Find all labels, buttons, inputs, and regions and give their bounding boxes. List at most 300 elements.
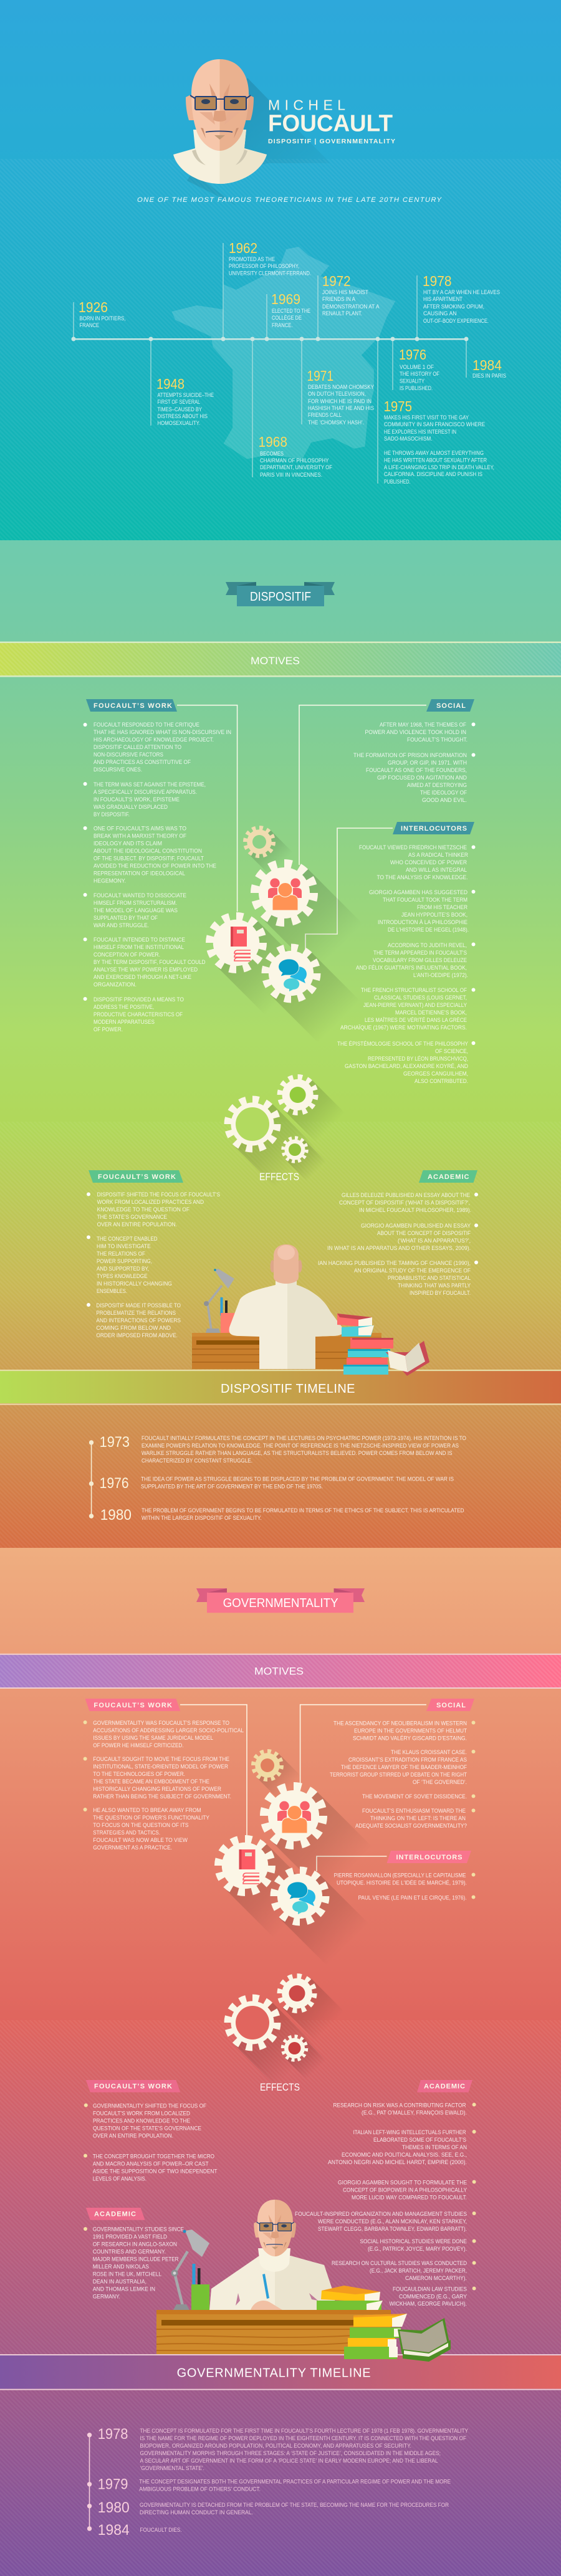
- event 1971: 1971: [307, 368, 333, 384]
- ribbon: Academic effects: [417, 2080, 472, 2092]
- text block: social 1: AFTER MAY 1968, THE THEMES OF: [380, 722, 466, 728]
- text block: Foucault's work 4: [84, 892, 186, 929]
- text block: effects left 1: FOUCAULT’S WORK FROM LOCALIZED: [93, 2110, 190, 2117]
- text block: gov interlocutors 1: UTOPIQUE. HISTOIRE DE L’IDÉE DE MARCHÉ, 1979).: [337, 1879, 467, 1887]
- map of France: [172, 247, 395, 459]
- ribbon: Foucault's Work effects: FOUCAULT’S WORK: [98, 1173, 176, 1181]
- text block: effects academic 3: IAN HACKING PUBLISHED THE TAMING OF CHANCE (1990),: [318, 1260, 471, 1267]
- text block: effects academic 3: PROBABILISTIC AND STATISTICAL: [388, 1275, 471, 1282]
- timeline entry 1979: AMBIGUOUS PROBLEM OF OTHERS’ CONDUCT.: [139, 2486, 261, 2493]
- event 1948: HOMOSEXUALITY.: [157, 420, 200, 427]
- text block: academic right 2: ELABORATED SOME OF FOUCAULT’S: [373, 2137, 466, 2144]
- text block: interlocutors 5: THE ÉPISTÉMOLOGIE SCHOOL OF THE PHILOSOPHY: [337, 1041, 469, 1047]
- text block: interlocutors 2: GIORGIO AGAMBEN HAS SUGGESTED: [369, 889, 467, 896]
- text block: gov work 2: HISTORICALLY CHANGING RELATIONS OF POWER: [93, 1786, 221, 1793]
- text block: gov work 3: [84, 1807, 210, 1851]
- text block: effects academic 3: [318, 1260, 478, 1297]
- event 1969: FRANCE.: [272, 322, 293, 329]
- event 1978: [423, 273, 500, 325]
- text block: effects academic 2: ABOUT THE CONCEPT OF DISPOSITIF: [377, 1230, 471, 1237]
- background: governmentality section: [0, 1548, 561, 2576]
- text block: interlocutors 5: REPRESENTED BY LÉON BRUNSCHVICQ,: [368, 1056, 468, 1062]
- text block: interlocutors 1: AS A RADICAL THINKER: [408, 852, 468, 859]
- text block: gov work 2: TO THE TECHNOLOGIES OF POWER.: [93, 1771, 185, 1778]
- text block: interlocutors 2: FROM HIS TEACHER: [417, 904, 467, 911]
- text block: social 2: THE FORMATION OF PRISON INFORMATION: [353, 752, 467, 759]
- text block: gov social 4: FOUCAULT’S ENTHUSIASM TOWARD THE: [362, 1808, 466, 1815]
- event 1978: OUT-OF-BODY EXPERIENCE.: [423, 318, 489, 325]
- event 1971: FOR WHICH HE IS PAID IN: [308, 398, 372, 405]
- text block: academic left: [84, 2226, 184, 2301]
- ribbon: Foucault's Work: FOUCAULT’S WORK: [94, 1702, 172, 1709]
- event 1926: FRANCE: [80, 322, 99, 329]
- text block: effects left 3: DISPOSITIF MADE IT POSSIBLE TO: [96, 1302, 181, 1309]
- event 1978: AFTER SMOKING OPIUM,: [423, 303, 484, 310]
- text block: Foucault's work 2: WAS GRADUALLY DISPLACED: [94, 804, 168, 811]
- connector lines: [177, 705, 426, 949]
- text block: Foucault's work 1: HIS ARCHAEOLOGY OF KNOWLEDGE PROJECT.: [94, 737, 214, 743]
- text block: effects left 1: QUESTION OF THE STATE’S GOVERNANCE: [93, 2125, 201, 2132]
- timeline entry 1984: FOUCAULT DIES.: [140, 2527, 182, 2534]
- text block: gov social 2: THE KLAUS CROISSANT CASE.: [391, 1749, 467, 1756]
- text block: interlocutors 2: JEAN HYPPOLITE’S BOOK,: [401, 912, 467, 918]
- text block: social 1: FOUCAULT’S THOUGHT.: [407, 737, 467, 743]
- band: Dispositif timeline: DISPOSITIF TIMELINE: [221, 1382, 355, 1396]
- text block: social 2: GROUP, OR GIP, IN 1971. WITH: [388, 760, 467, 766]
- text block: academic right 3: CONCEPT OF BIOPOWER IN A PHILOSOPHICALLY: [343, 2187, 467, 2193]
- ribbon: Social: [426, 699, 474, 712]
- text block: academic right 7: COMMENCED (E.G., GARY: [399, 2293, 467, 2301]
- band: motives: [0, 642, 561, 677]
- open book: [398, 2318, 451, 2362]
- text block: Foucault's work 5: ANALYSE THE WAY POWER IS EMPLOYED: [94, 966, 198, 973]
- bottom of stack overlapping band: [344, 2340, 451, 2362]
- timeline entry 1980: DIRECTING HUMAN CONDUCT IN GENERAL.: [140, 2509, 253, 2516]
- text block: Foucault's work 5: AND EXERCISED THROUGH A NET-LIKE: [94, 974, 191, 981]
- text block: academic left: OF RESEARCH IN ANGLO-SAXON: [93, 2241, 177, 2248]
- timeline entry 1976: 1976: [100, 1475, 129, 1492]
- text block: gov social 2: TERRORIST GROUP STIRRED UP DEBATE ON THE RIGHT: [330, 1772, 467, 1778]
- event 1971: HASHISH THAT HE AND HIS: [308, 405, 374, 412]
- band: Governmentality timeline: [0, 2354, 561, 2390]
- text block: social 2: THE IDEOLOGY OF: [420, 789, 467, 796]
- event 1975: HE THROWS AWAY ALMOST EVERYTHING: [384, 450, 484, 457]
- text block: Foucault's work 3: [84, 825, 216, 885]
- text block: gov social 4: THINKING ON THE LEFT: IS THERE AN: [370, 1815, 466, 1822]
- panel: dispositif section: [0, 582, 561, 1524]
- connector lines: [180, 1705, 426, 1871]
- text block: interlocutors 5: OF SCIENCE,: [435, 1048, 468, 1055]
- timeline entry 1973: CHARACTERIZED BY CONSTANT STRUGGLE.: [141, 1457, 252, 1464]
- event 1962: 1962: [229, 240, 257, 256]
- gear: chat icon: [274, 1871, 369, 1966]
- timeline entry 1973: FOUCAULT INITIALLY FORMULATES THE CONCEPT IN THE LECTURES ON PSYCHIATRIC POWER (1973-1974). HIS INTENTION IS TO: [141, 1435, 466, 1442]
- text block: Foucault's work 4: FOUCAULT WANTED TO DISSOCIATE: [94, 892, 186, 899]
- banner: Dispositif: [226, 582, 335, 606]
- text block: gov work 3: THE QUESTION OF POWER’S FUNCTIONALITY: [93, 1815, 210, 1821]
- text block: Foucault's work 1: AND PRACTICES AS CONSTITUTIVE OF: [94, 759, 191, 766]
- text block: effects left 3: PROBLEMATIZE THE RELATIONS: [96, 1310, 176, 1317]
- timeline entry 1976: THE IDEA OF POWER AS STRUGGLE BEGINS TO BE DISPLACED BY THE PROBLEM OF GOVERNMENT. THE MODEL OF WAR IS: [141, 1476, 454, 1483]
- event 1975: [384, 398, 494, 485]
- gear: book icon: [219, 1839, 317, 1938]
- ribbon: Foucault's Work effects: [86, 2080, 180, 2092]
- tagline: ONE OF THE MOST FAMOUS THEORETICIANS IN THE LATE 20TH CENTURY: [137, 196, 442, 204]
- text block: gov work 3: STRATEGIES AND TACTICS.: [93, 1829, 160, 1836]
- text block: effects academic 3: THINKING THAT WAS PARTLY: [398, 1282, 471, 1289]
- timeline entry 1978: [98, 2426, 469, 2472]
- text block: gov work 3: FOUCAULT WAS NOW ABLE TO VIEW: [93, 1837, 188, 1844]
- event 1971: THE ‘CHOMSKY HASH’.: [308, 419, 364, 426]
- text block: Foucault's work 4: THE MODEL OF LANGUAGE WAS: [94, 907, 178, 914]
- text block: gov interlocutors 1: PIERRE ROSANVALLON (ESPECIALLY LE CAPITALISME: [334, 1872, 466, 1879]
- text block: Foucault's work 5: [84, 937, 206, 988]
- event 1976: IS PUBLISHED.: [400, 385, 433, 392]
- text block: Foucault's work 2: IN FOUCAULT’S WORK, EPISTEME: [94, 796, 180, 803]
- text block: academic left: GOVERNMENTALITY STUDIES SINCE: [93, 2226, 184, 2233]
- text block: Foucault's work 6: PRODUCTIVE CHARACTERISTICS OF: [94, 1011, 183, 1018]
- event 1984: [472, 357, 506, 379]
- text block: Foucault's work 6: OF POWER.: [94, 1026, 123, 1033]
- text block: gov interlocutors 2: PAUL VEYNE (LE PAIN ET LE CIRQUE, 1976).: [358, 1894, 467, 1902]
- timeline entry 1973: [100, 1434, 466, 1464]
- heading: effects: EFFECTS: [260, 2081, 300, 2093]
- timeline entry 1973: 1973: [100, 1434, 130, 1451]
- event 1984: DIES IN PARIS: [472, 373, 506, 379]
- text block: Foucault's work 3: ONE OF FOUCAULT’S AIMS WAS TO: [94, 825, 186, 832]
- text block: interlocutors 1: FOUCAULT VIEWED FRIEDRICH NIETZSCHE: [359, 844, 467, 851]
- heading: effects: EFFECTS: [259, 1171, 299, 1183]
- books on desk: [317, 2286, 383, 2311]
- text block: effects left 1: GOVERNMENTALITY SHIFTED THE FOCUS OF: [93, 2102, 206, 2110]
- text block: academic right 6: (E.G., JACK BRATICH, JEREMY PACKER,: [370, 2268, 467, 2274]
- event 1972: 1972: [322, 273, 350, 289]
- timeline entry 1978: BIOPOWER, ORGANIZED AROUND POPULATION, POLITICAL ECONOMY, AND APPARATUSES OF SECURITY.: [140, 2443, 411, 2450]
- portrait long shadow: [187, 78, 330, 206]
- event 1969: 1969: [271, 291, 300, 307]
- text block: academic right 1: [333, 2102, 476, 2116]
- text block: social 2: GIP FOCUSED ON AGITATION AND: [377, 775, 467, 781]
- ribbon: Interlocutors: [393, 822, 474, 834]
- text block: academic right 4: WERE CONDUCTED (E.G., ALAN MCKINLAY, KEN STARKEY,: [318, 2218, 467, 2225]
- text block: effects left 1: DISPOSITIF SHIFTED THE FOCUS OF FOUCAULT’S: [97, 1191, 220, 1198]
- chart: governmentality timeline axis: [87, 2433, 92, 2531]
- text block: effects left 1: WORK FROM LOCALIZED PRACTICES AND: [97, 1199, 204, 1206]
- event 1978: HIS APARTMENT: [423, 296, 463, 303]
- event 1975: COMMUNITY IN SAN FRANCISCO WHERE: [384, 421, 485, 428]
- text block: academic right 2: ITALIAN LEFT-WING INTELLECTUALS FURTHER: [353, 2129, 466, 2136]
- text block: Foucault's work 1: FOUCAULT RESPONDED TO THE CRITIQUE: [94, 722, 199, 728]
- banner: Governmentality: GOVERNMENTALITY: [223, 1596, 338, 1610]
- text block: interlocutors 2: [369, 889, 475, 933]
- ribbon: Academic effects: ACADEMIC: [428, 1173, 469, 1181]
- hand and pen: [251, 2274, 282, 2310]
- event 1978: HIT BY A CAR WHEN HE LEAVES: [423, 289, 500, 296]
- timeline entry 1984: 1984: [98, 2522, 130, 2539]
- text block: interlocutors 2: INTRODUCTION À LA PHILOSOPHIE: [378, 919, 467, 926]
- text block: effects left 2: LEVELS OF ANALYSIS.: [93, 2176, 146, 2182]
- text block: effects left 3: COMING FROM BELOW AND: [96, 1325, 171, 1332]
- text block: gov work 3: TO FOCUS ON THE QUESTION OF ITS: [93, 1822, 188, 1829]
- text block: effects left 2: [87, 1235, 172, 1295]
- text block: effects academic 2: (‘WHAT IS AN APPARATUS?’,: [398, 1238, 471, 1244]
- text block: gov social 2: OF ‘THE GOVERNED’.: [413, 1779, 467, 1786]
- event 1972: DEMONSTRATION AT A: [322, 303, 380, 310]
- text block: gov social 3: THE MOVEMENT OF SOVIET DISSIDENCE.: [362, 1793, 467, 1800]
- text block: gov work 1: [84, 1720, 244, 1749]
- event 1962: [229, 240, 311, 277]
- text block: effects left 2: HIM TO INVESTIGATE: [97, 1243, 151, 1250]
- text block: academic right 1: RESEARCH ON RISK WAS A CONTRIBUTING FACTOR: [333, 2102, 466, 2109]
- text block: Foucault's work 6: ADDRESS THE POSITIVE,: [94, 1004, 154, 1011]
- text block: effects academic 2: GIORGIO AGAMBEN PUBLISHED AN ESSAY: [361, 1223, 471, 1229]
- text block: social 1: POWER AND VIOLENCE TOOK HOLD IN: [365, 729, 466, 736]
- event 1926: 1926: [79, 299, 108, 315]
- text block: interlocutors 1: AND WILL AS INTEGRAL: [406, 867, 467, 874]
- text block: gov social 2: THE DEFENCE LAWYER OF THE BAADER-MEINHOF: [341, 1764, 467, 1771]
- ribbon: Interlocutors: INTERLOCUTORS: [396, 1854, 463, 1861]
- timeline entry 1984: [98, 2522, 182, 2539]
- event 1962: PROMOTED AS THE: [229, 256, 275, 263]
- text block: gov work 3: GOVERNMENT AS A PRACTICE.: [93, 1844, 172, 1851]
- ribbon: Social: [426, 1699, 474, 1711]
- event 1969: [271, 291, 310, 329]
- text block: Foucault's work 3: AVOIDED THE REDUCTION OF POWER INTO THE: [94, 862, 216, 870]
- text block: social 2: [353, 752, 475, 804]
- event 1968: BECOMES: [260, 451, 284, 457]
- event 1971: [307, 368, 374, 426]
- text block: effects left 2: [84, 2154, 218, 2182]
- text block: effects academic 2: [327, 1223, 478, 1252]
- text block: Foucault's work 5: ORGANIZATION.: [94, 981, 137, 988]
- text block: effects left 1: PRACTICES AND KNOWLEDGE TO THE: [93, 2117, 190, 2125]
- event 1926: [79, 299, 126, 329]
- event 1969: ELECTED TO THE: [272, 308, 310, 315]
- band: Dispositif timeline: [0, 1370, 561, 1405]
- text block: interlocutors 4: [340, 987, 475, 1031]
- text block: interlocutors 4: MARCEL DETIENNE’S BOOK,: [395, 1009, 467, 1016]
- text block: Foucault's work 4: SUPPLANTED BY THAT OF: [94, 915, 158, 922]
- text block: social 1: [365, 722, 475, 743]
- text block: academic left: COUNTRIES AND GERMANY.: [93, 2248, 166, 2256]
- text block: Foucault's work 6: DISPOSITIF PROVIDED A MEANS TO: [94, 996, 184, 1003]
- text block: effects left 1: OVER AN ENTIRE POPULATION.: [97, 1221, 177, 1228]
- timeline entry 1976: [100, 1475, 454, 1492]
- text block: interlocutors 4: LES MAÎTRES DE VÉRITÉ DANS LA GRÈCE: [365, 1017, 467, 1024]
- text block: Foucault's work 2: THE TERM WAS SET AGAINST THE EPISTEME,: [94, 781, 206, 788]
- text block: Foucault's work 5: FOUCAULT INTENDED TO DISTANCE: [94, 937, 185, 943]
- text block: social 2: FOUCAULT AS ONE OF THE FOUNDERS,: [366, 767, 467, 774]
- text block: interlocutors 4: ARCHAÏQUE (1967) WERE MOTIVATING FACTORS.: [340, 1024, 467, 1031]
- event 1975: HE HAS WRITTEN ABOUT SEXUALITY AFTER: [384, 457, 487, 464]
- text block: academic right 4: [295, 2211, 476, 2233]
- timeline entry 1979: THE CONCEPT DESIGNATES BOTH THE GOVERNMENTAL PRACTICES OF A PARTICULAR REGIME OF POWER AND THE MORE: [139, 2479, 451, 2485]
- text block: effects left 2: AND MACRO ANALYSIS OF POWER–OR CAST: [93, 2161, 209, 2167]
- text block: interlocutors 4: JEAN-PIERRE VERNANT) AND ESPECIALLY: [363, 1002, 467, 1009]
- illustration: Foucault at desk from behind: [192, 1244, 429, 1375]
- timeline entry 1978: 1978: [98, 2426, 128, 2443]
- text block: academic right 7: FOUCAULDIAN LAW STUDIES: [393, 2286, 467, 2293]
- text block: Foucault's work 4: HIMSELF FROM STRUCTURALISM.: [94, 900, 177, 907]
- event 1972: RENAULT PLANT.: [322, 310, 362, 317]
- books stack top: [337, 1314, 374, 1337]
- text block: effects left 2: TYPES KNOWLEDGE: [97, 1273, 147, 1280]
- event 1976: THE HISTORY OF: [400, 371, 439, 378]
- event 1968: [258, 434, 332, 479]
- books stack bottom: [343, 1338, 393, 1375]
- pen cup: [191, 2264, 209, 2310]
- event 1968: DEPARTMENT, UNIVERSITY OF: [260, 464, 332, 471]
- text block: Foucault's work 1: DISPOSITIF CALLED ATTENTION TO: [94, 744, 181, 751]
- text block: academic left: GERMANY.: [93, 2293, 120, 2301]
- event 1984: 1984: [472, 357, 502, 373]
- text block: interlocutors 3: ACCORDING TO JUDITH REVEL,: [388, 942, 467, 949]
- event 1976: [399, 346, 439, 392]
- text block: Foucault's work 3: ABOUT THE IDEOLOGICAL CONSTITUTION: [94, 847, 202, 855]
- timeline entry 1980: [98, 2499, 449, 2516]
- text block: interlocutors 5: GEORGES CANGUILHEM,: [403, 1071, 468, 1077]
- event 1971: DEBATES NOAM CHOMSKY: [308, 384, 374, 391]
- event 1975: A LIFE-CHANGING LSD TRIP IN DEATH VALLEY,: [384, 464, 494, 471]
- ribbon: Academic left: [86, 2208, 145, 2220]
- text block: effects academic 3: INSPIRED BY FOUCAULT.: [410, 1290, 471, 1297]
- text block: interlocutors 4: THE FRENCH STRUCTURALIST SCHOOL OF: [361, 987, 467, 994]
- text block: effects left 1: KNOWLEDGE TO THE QUESTION OF: [97, 1206, 189, 1213]
- head from behind: [271, 1244, 302, 1284]
- timeline entry 1979: 1979: [98, 2476, 128, 2493]
- text block: academic right 6: [332, 2260, 476, 2282]
- ribbon: Academic effects: ACADEMIC: [424, 2082, 465, 2090]
- ribbon: Foucault's Work effects: FOUCAULT’S WORK: [94, 2082, 172, 2090]
- text block: academic right 4: FOUCAULT-INSPIRED ORGANIZATION AND MANAGEMENT STUDIES: [295, 2211, 467, 2218]
- text block: Foucault's work 5: BY THE TERM DISPOSITIF, FOUCAULT COULD: [94, 959, 206, 966]
- background: hero section: [0, 0, 561, 540]
- ribbon: Interlocutors: INTERLOCUTORS: [401, 825, 467, 832]
- text block: effects academic 1: [339, 1192, 478, 1214]
- text block: interlocutors 3: L’ANTI-OEDIPE (1972).: [413, 972, 468, 979]
- text block: academic right 7: WICKHAM, GEORGE PAVLICH).: [389, 2301, 467, 2307]
- text block: academic right 2: THEMES IN TERMS OF AN: [402, 2144, 467, 2151]
- text block: academic right 5: (E.G., PATRICK JOYCE, MARY POOVEY).: [368, 2246, 467, 2253]
- text block: gov social 1: SCHMIDT AND VALÉRY GISCARD D’ESTAING.: [353, 1735, 467, 1742]
- title: Foucault: FOUCAULT: [268, 111, 393, 137]
- text block: effects left 3: ORDER IMPOSED FROM ABOVE.: [96, 1332, 178, 1339]
- body: [229, 1279, 343, 1369]
- gear: book icon: [210, 917, 309, 1015]
- panel: biography timeline: [71, 240, 506, 485]
- lamp: [204, 1269, 234, 1333]
- event 1948: TIMES–CAUSED BY: [157, 406, 202, 413]
- text block: Foucault's work 1: [84, 722, 231, 773]
- text block: academic right 5: SOCIAL HISTORICAL STUDIES WERE DONE: [360, 2238, 467, 2245]
- event 1948: 1948: [156, 376, 185, 392]
- text block: social 2: AIMED AT DESTROYING: [407, 782, 467, 789]
- text block: Foucault's work 3: IDEOLOGY AND ITS CLAIM: [94, 840, 162, 847]
- text block: effects left 2: IN HISTORICALLY CHANGING: [97, 1281, 172, 1287]
- event 1972: [322, 273, 380, 317]
- text block: gov social 4: [355, 1808, 475, 1829]
- gear: small tan: [246, 828, 293, 875]
- text block: interlocutors 3: THE TERM APPEARED IN FOUCAULT’S: [373, 950, 467, 956]
- text block: Foucault's work 3: REPRESENTATION OF IDEOLOGICAL: [94, 870, 186, 877]
- text block: gov work 3: HE ALSO WANTED TO BREAK AWAY FROM: [93, 1807, 201, 1814]
- books stack bottom: [344, 2314, 407, 2359]
- portrait of Michel Foucault: [173, 59, 267, 184]
- title: Michel: MICHEL: [268, 97, 345, 113]
- event 1976: VOLUME 1 OF: [400, 364, 434, 371]
- timeline entry 1980: WITHIN THE LARGER DISPOSITIF OF SEXUALITY.: [141, 1515, 262, 1522]
- ribbon: Social: SOCIAL: [436, 702, 466, 710]
- illustration: Foucault at desk, front view: [156, 2200, 451, 2362]
- text block: interlocutors 3: [356, 942, 475, 979]
- text block: gov social 2: [330, 1749, 475, 1786]
- ribbon: Academic effects: [419, 1170, 477, 1183]
- text block: gov work 2: RATHER THAN BEING THE SUBJECT OF GOVERNMENT.: [93, 1793, 231, 1800]
- event 1975: SADO-MASOCHISM.: [384, 436, 433, 442]
- text block: effects left 1: THE STATE’S GOVERNANCE: [97, 1214, 167, 1221]
- event 1962: UNIVERSITY CLERMONT-FERRAND.: [229, 270, 311, 277]
- text block: effects academic 1: CONCEPT OF DISPOSITIF (‘WHAT IS A DISPOSITIF?’,: [339, 1200, 470, 1206]
- text block: academic right 6: CAMERON MCCARTHY).: [405, 2275, 467, 2282]
- timeline entry 1980: THE PROBLEM OF GOVERNMENT BEGINS TO BE FORMULATED IN TERMS OF THE ETHICS OF THE SUBJECT. THIS IS ARTICULATED: [141, 1507, 464, 1514]
- gear: people icon: [265, 1787, 373, 1895]
- desk: [156, 2310, 391, 2354]
- text block: academic right 7: [389, 2286, 476, 2307]
- text block: Foucault's work 1: NON-DISCURSIVE FACTORS: [94, 751, 163, 758]
- text block: academic left: 1991 PROVIDED A VAST FIELD: [93, 2233, 167, 2241]
- text block: academic right 3: MORE LUCID WAY COMPARED TO FOUCAULT.: [352, 2195, 467, 2201]
- gear: people icon: [256, 864, 363, 972]
- open book: [386, 1341, 429, 1374]
- desk: [192, 1333, 381, 1369]
- gears: effects: [228, 1077, 345, 1188]
- event 1948: FIRST OF SEVERAL: [157, 399, 201, 406]
- event 1978: 1978: [423, 273, 451, 289]
- text block: interlocutors 2: THAT FOUCAULT TOOK THE TERM: [383, 897, 467, 904]
- ribbon: Foucault's Work: [86, 699, 177, 712]
- ribbon: Foucault's Work: [85, 1699, 180, 1711]
- text block: gov social 1: [333, 1720, 475, 1742]
- timeline entry 1973: EXAMINE POWER’S RELATION TO KNOWLEDGE. THE POINT OF REFERENCE IS THE NIETZSCHE-INSPIRED VIEW OF POWER AS: [141, 1443, 459, 1449]
- ribbon: Social: SOCIAL: [436, 1702, 466, 1709]
- text block: academic right 5: [360, 2238, 476, 2253]
- text block: effects academic 2: IN WHAT IS AN APPARATUS AND OTHER ESSAYS, 2009).: [327, 1245, 471, 1252]
- lamp: [171, 2230, 209, 2310]
- banner: Governmentality: [196, 1588, 365, 1613]
- text block: gov work 2: THE STATE BECAME AN EMBODIMENT OF THE: [93, 1778, 209, 1785]
- event 1976: SEXUALITY: [400, 378, 424, 385]
- panel: hero header: [137, 59, 442, 206]
- text block: academic right 4: STEWART CLEGG, BARBARA TOWNLEY, EDWARD BARRATT).: [318, 2226, 467, 2233]
- text block: interlocutors 1: TO THE ANALYSIS OF KNOWLEDGE.: [376, 874, 467, 881]
- text block: Foucault's work 6: [84, 996, 184, 1033]
- text block: Foucault's work 1: THAT HE HAS IGNORED WHAT IS NON-DISCURSIVE IN: [94, 729, 231, 736]
- text block: Foucault's work 1: DISCURSIVE ONES.: [94, 766, 142, 773]
- band: motives governmentality: MOTIVES: [254, 1666, 304, 1677]
- timeline entry 1980: [100, 1507, 464, 1524]
- text block: gov work 1: OF POWER HE HIMSELF CRITICIZED.: [93, 1742, 183, 1749]
- text block: effects left 2: ASIDE THE SUPPOSITION OF TWO INDEPENDENT: [93, 2168, 218, 2175]
- text block: interlocutors 5: GASTON BACHELARD, ALEXANDRE KOYRÉ, AND: [345, 1063, 468, 1070]
- event 1975: MAKES HIS FIRST VISIT TO THE GAY: [384, 414, 469, 421]
- event 1972: FRIENDS IN A: [322, 296, 356, 303]
- gear: small tan: [254, 1752, 301, 1799]
- text block: gov work 1: GOVERNMENTALITY WAS FOUCAULT’S RESPONSE TO: [93, 1720, 229, 1727]
- event 1948: DISTRESS ABOUT HIS: [157, 413, 208, 420]
- text block: academic left: ROSE IN THE UK, MITCHELL: [93, 2271, 162, 2278]
- timeline entry 1976: SUPPLANTED BY THE ART OF GOVERNMENT BY THE END OF THE 1970S.: [141, 1483, 323, 1491]
- text block: effects left 1: [84, 2102, 206, 2140]
